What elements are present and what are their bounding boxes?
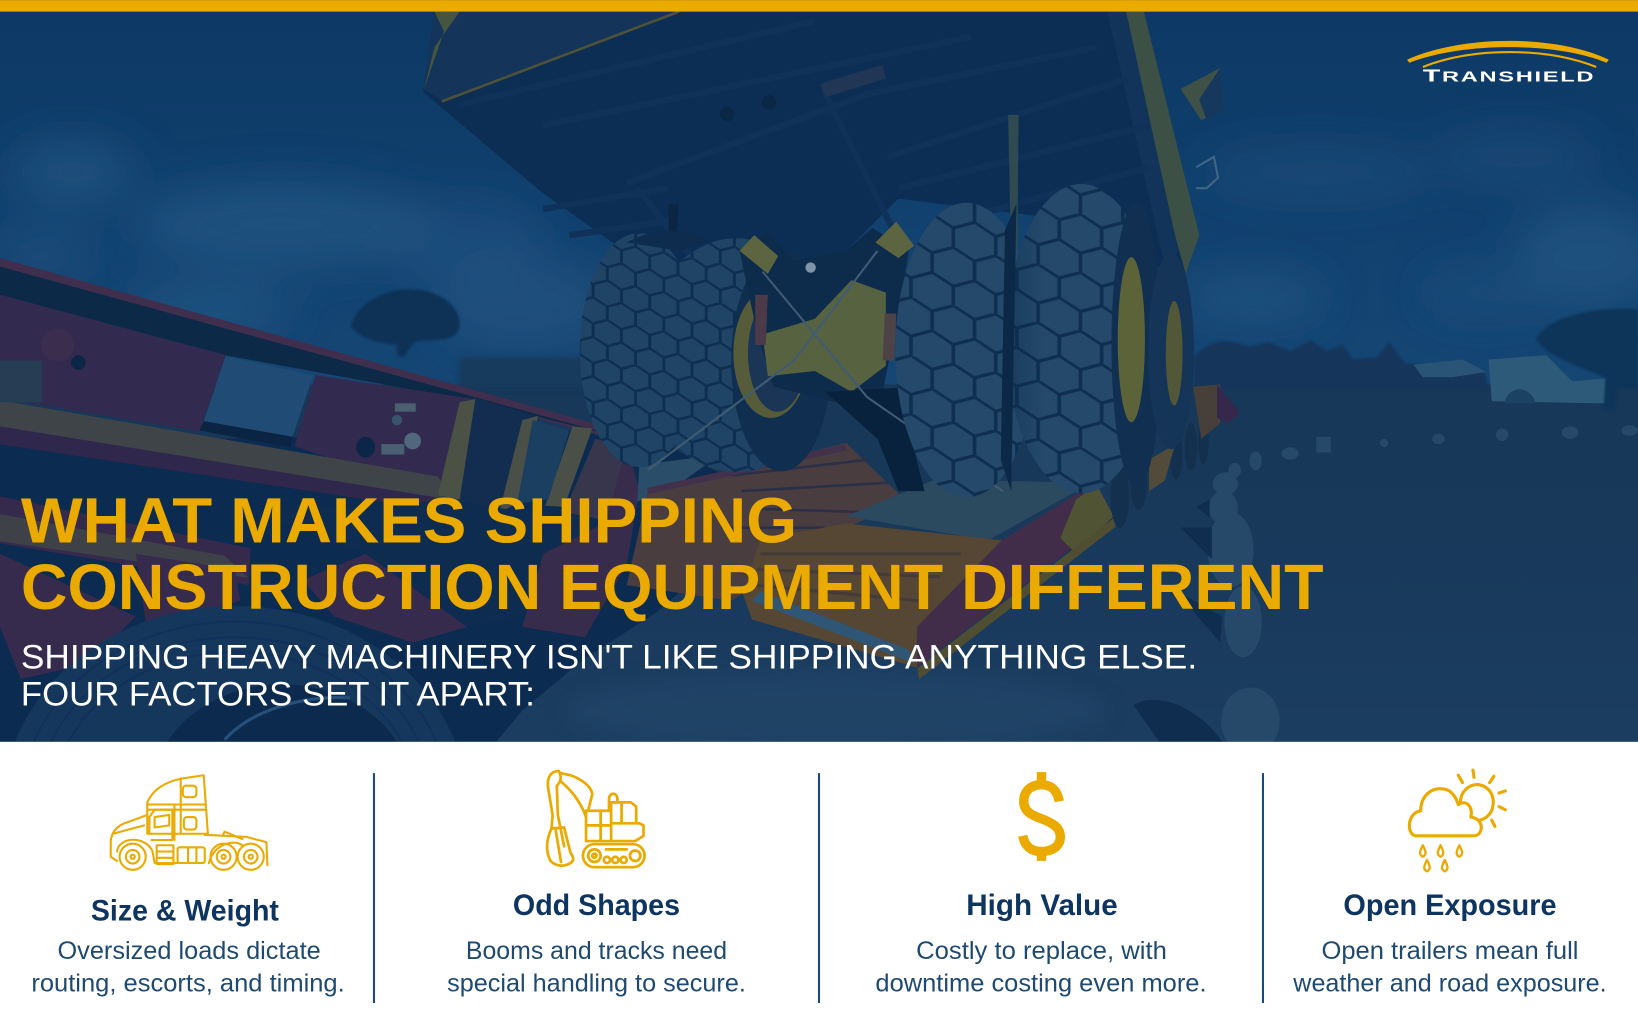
body text: Size & Weight: routing, escorts, and timing. bbox=[31, 969, 345, 997]
panel: Size & Weight bbox=[31, 775, 345, 997]
body text: Size & Weight bbox=[31, 937, 345, 997]
body text: Odd Shapes: special handling to secure. bbox=[447, 969, 746, 997]
heading: Size & Weight: Size & Weight bbox=[91, 895, 279, 927]
left tree bbox=[351, 289, 460, 357]
heading: High Value: High Value bbox=[966, 890, 1118, 922]
icon: dollar sign bbox=[1023, 772, 1060, 861]
title: CONSTRUCTION EQUIPMENT DIFFERENT bbox=[21, 551, 1324, 623]
dump truck body underside bbox=[423, 12, 1224, 345]
subtitle bbox=[21, 639, 1197, 713]
trailer lower beams and red panels behind title bbox=[0, 444, 639, 679]
sky with clouds bbox=[0, 0, 1638, 439]
body text: Open Exposure: Open trailers mean full bbox=[1321, 937, 1578, 965]
dark lower-left foreground bbox=[0, 428, 752, 742]
body text: Odd Shapes: Booms and tracks need bbox=[466, 937, 727, 965]
panel: Open Exposure bbox=[1292, 770, 1607, 997]
subtitle: FOUR FACTORS SET IT APART: bbox=[21, 675, 535, 713]
title: WHAT MAKES SHIPPING bbox=[21, 484, 797, 556]
ramp and trailer deck bbox=[627, 385, 1240, 679]
icon: cloud with sun and rain bbox=[1409, 770, 1505, 836]
panel: High Value bbox=[875, 772, 1207, 997]
ground surface and rocks bbox=[564, 425, 1638, 754]
body text: High Value: downtime costing even more. bbox=[875, 969, 1207, 997]
far right tyre bbox=[1148, 253, 1194, 449]
inner right tyre bbox=[895, 203, 1037, 497]
rear-left tyre bbox=[580, 233, 699, 467]
white factors panel bbox=[0, 742, 1638, 1024]
logo: Transhield bbox=[1407, 41, 1609, 86]
top accent bar bbox=[0, 0, 1638, 12]
body text: Open Exposure bbox=[1292, 937, 1607, 997]
icon: semi truck bbox=[111, 775, 267, 870]
panel: Odd Shapes bbox=[447, 771, 746, 997]
body text: High Value: Costly to replace, with bbox=[916, 937, 1167, 965]
title bbox=[21, 484, 1324, 623]
axle and chains bbox=[740, 228, 909, 402]
heading: Odd Shapes: Odd Shapes bbox=[513, 890, 680, 922]
icon: excavator bbox=[547, 771, 645, 867]
distant ground and trees bbox=[0, 309, 1638, 745]
trailer: red beam on the left bbox=[0, 258, 635, 522]
tyres and axle bbox=[580, 184, 1194, 497]
subtitle: SHIPPING HEAVY MACHINERY ISN'T LIKE SHIPPING ANYTHING ELSE. bbox=[21, 639, 1197, 677]
body text: Odd Shapes bbox=[447, 937, 746, 997]
outer right tyre bbox=[1006, 184, 1156, 493]
foreground tyre bottom-left bbox=[3, 606, 467, 1003]
left tyre with rim bbox=[642, 238, 830, 472]
body text: High Value bbox=[875, 937, 1207, 997]
body text: Size & Weight: Oversized loads dictate bbox=[57, 937, 321, 965]
logo: Transhield: T RANSHIELD bbox=[1423, 66, 1595, 86]
heading: Open Exposure: Open Exposure bbox=[1343, 890, 1557, 922]
body text: Open Exposure: weather and road exposure. bbox=[1292, 969, 1607, 997]
